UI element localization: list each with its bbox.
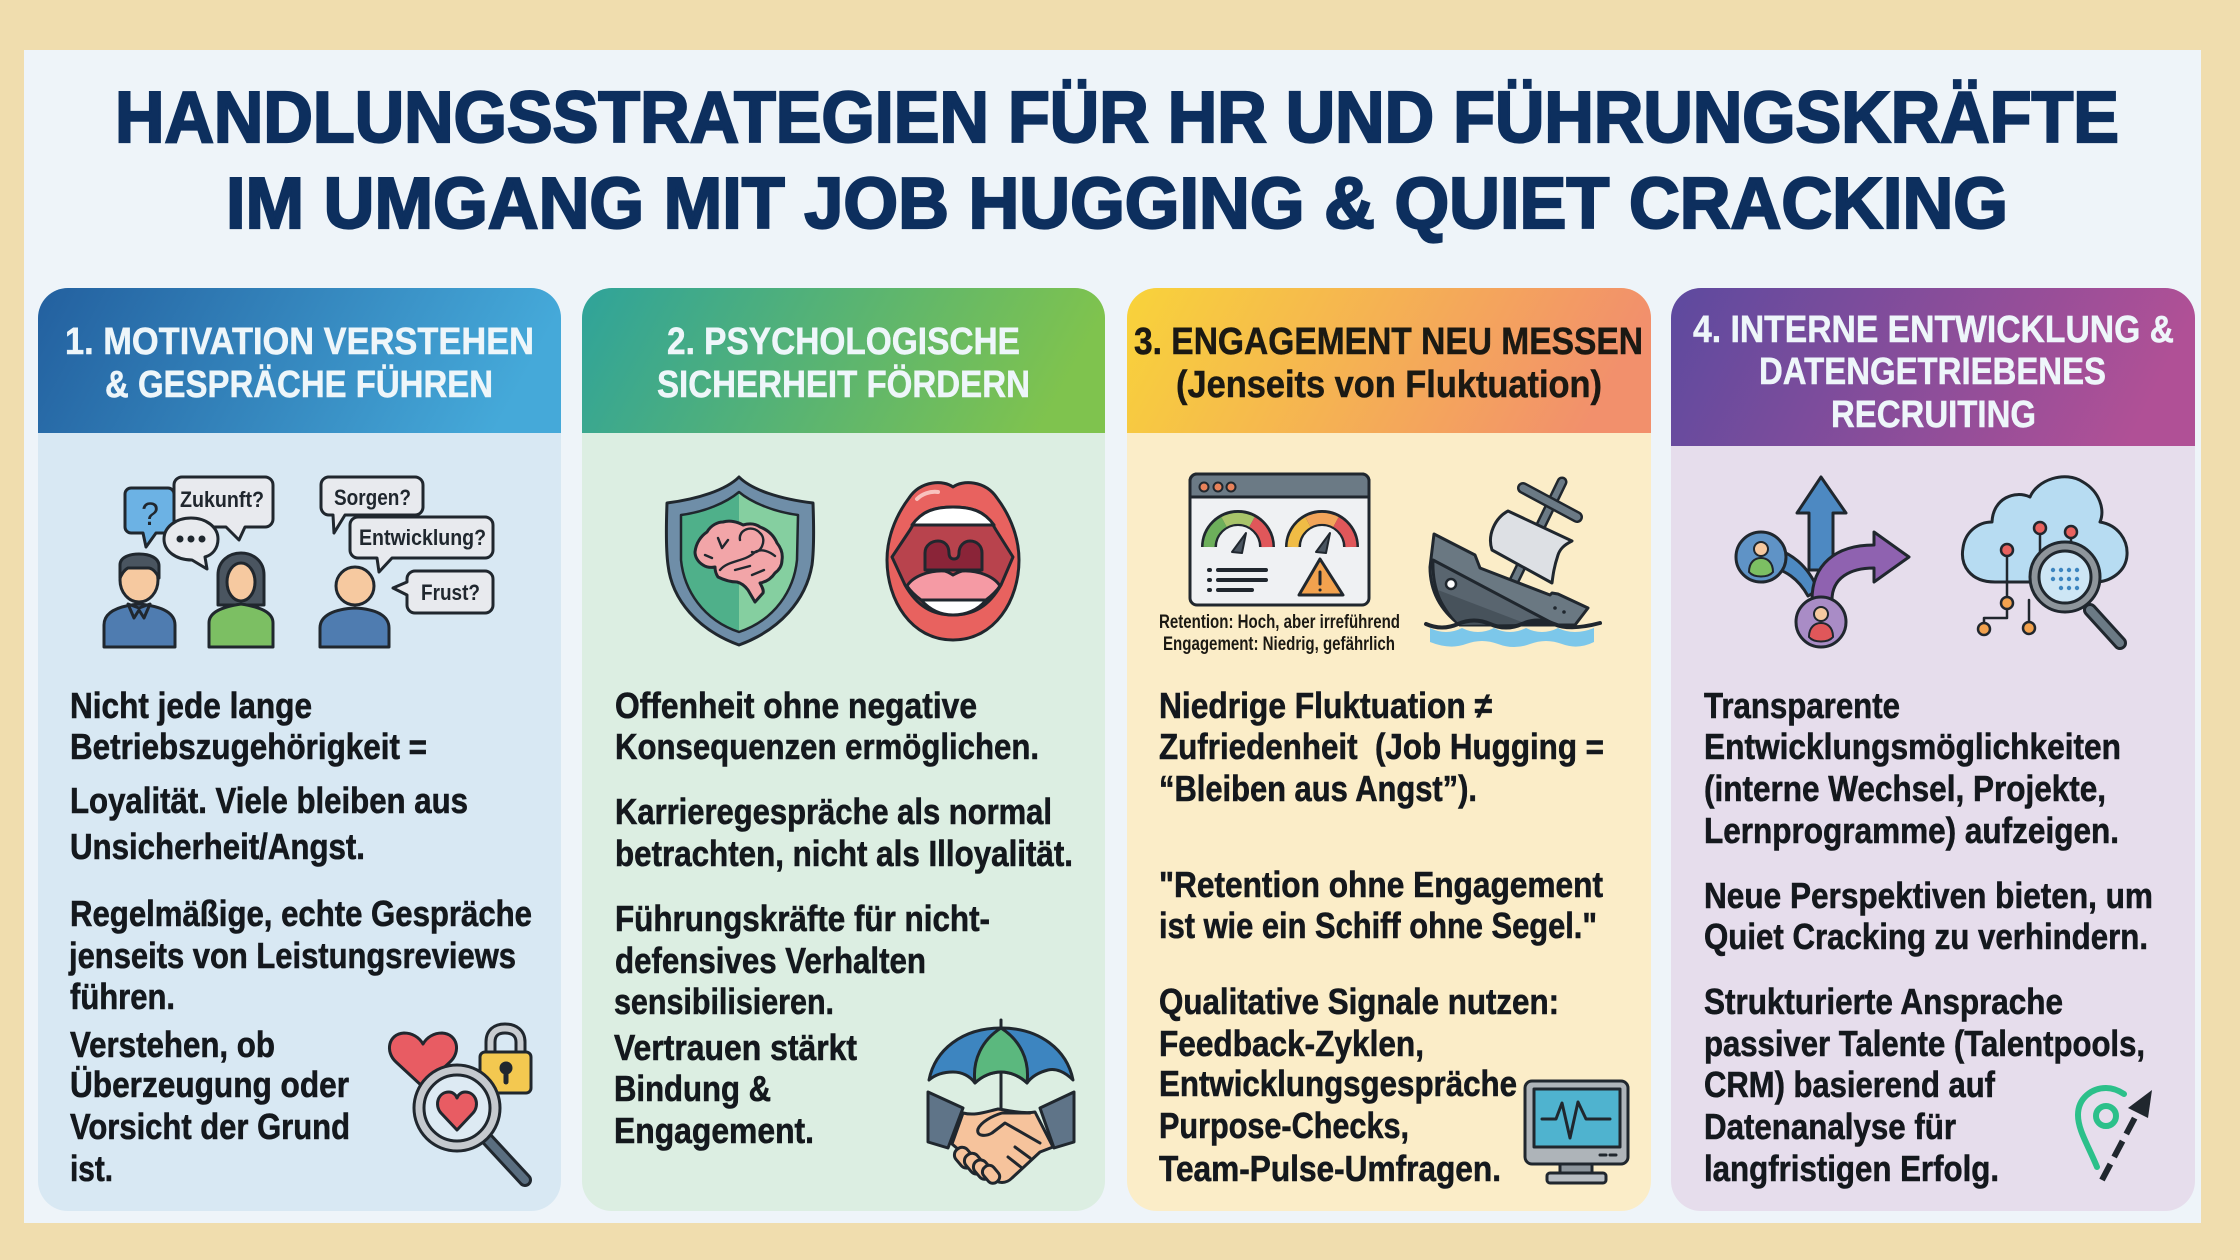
panel 1 text: Regelmäßige, echte Gespräche <box>70 893 532 934</box>
panel 3 header <box>1127 288 1651 433</box>
panel 1 header: & GESPRÄCHE FÜHREN <box>105 363 493 406</box>
panel 3 text: Feedback-Zyklen, <box>1159 1023 1424 1064</box>
panel 1 header <box>38 288 561 433</box>
panel 1 header: 1. MOTIVATION VERSTEHEN <box>65 321 534 363</box>
panel 4 text <box>1704 685 2153 1189</box>
panel 2 header <box>582 288 1105 433</box>
panel 4 text: Strukturierte Ansprache <box>1704 981 2063 1022</box>
icon: people talking with speech bubbles: Entwicklung? <box>359 525 486 550</box>
panel 4 text: Datenanalyse für <box>1704 1106 1956 1147</box>
panel 2 text: Bindung & <box>614 1068 771 1109</box>
panel 2 header: SICHERHEIT FÖRDERN <box>657 363 1030 406</box>
panel 4 text: Transparente <box>1704 685 1900 726</box>
panel 3 text: "Retention ohne Engagement <box>1159 864 1603 905</box>
panel 4 header: 4. INTERNE ENTWICKLUNG & <box>1693 309 2174 351</box>
icon: umbrella over handshake <box>928 1020 1074 1186</box>
panel 4 header: RECRUITING <box>1831 394 2036 436</box>
panel 1 text: jenseits von Leistungsreviews <box>68 935 516 976</box>
icon: open mouth <box>887 483 1019 640</box>
icon: dashboard with gauges <box>1190 474 1369 605</box>
panel 3 header: 3. ENGAGEMENT NEU MESSEN <box>1134 321 1643 363</box>
panel 3 text: ist wie ein Schiff ohne Segel." <box>1159 905 1597 946</box>
panel 4 header: DATENGETRIEBENES <box>1759 351 2106 393</box>
title: HANDLUNGSSTRATEGIEN FÜR HR UND FÜHRUNGSKRÄFTE <box>115 78 2119 158</box>
panel: 4 Interne Entwicklung <box>1671 288 2195 1211</box>
panel 2 text: defensives Verhalten <box>615 940 926 981</box>
panel 1 text: Vorsicht der Grund <box>70 1106 350 1147</box>
dashboard caption <box>1159 612 1400 655</box>
panel 1 text: Nicht jede lange <box>70 685 312 726</box>
dashboard caption: Retention: Hoch, aber irreführend <box>1159 612 1400 633</box>
panel 2 text: sensibilisieren. <box>614 981 834 1022</box>
title: IM UMGANG MIT JOB HUGGING & QUIET CRACKING <box>226 164 2008 244</box>
panel 2 text: Führungskräfte für nicht- <box>615 898 990 939</box>
panel 4 text: langfristigen Erfolg. <box>1704 1148 1999 1189</box>
panel 4 text: (interne Wechsel, Projekte, <box>1704 768 2106 809</box>
panel 3 text: Team-Pulse-Umfragen. <box>1159 1148 1501 1189</box>
panel 4 text: passiver Talente (Talentpools, <box>1704 1023 2145 1064</box>
panel 4 text: Quiet Cracking zu verhindern. <box>1704 916 2148 957</box>
icon: people talking with speech bubbles: Frust? <box>421 580 480 605</box>
panel 3 text: Qualitative Signale nutzen: <box>1159 981 1559 1022</box>
panel 1 text: führen. <box>70 976 175 1017</box>
panel: 1 Motivation verstehen <box>38 288 561 1211</box>
panel 2 text: Karrieregespräche als normal <box>615 791 1052 832</box>
panel 4 text: Entwicklungsmöglichkeiten <box>1704 726 2121 767</box>
icon: people talking with speech bubbles <box>104 477 493 647</box>
icon: location pin with dashed arrow <box>2078 1088 2152 1180</box>
panel 1 text: Verstehen, ob <box>70 1024 275 1065</box>
panel 1 text <box>68 685 532 1189</box>
panel 1 text: Loyalität. Viele bleiben aus <box>70 780 468 821</box>
panel: 3 Engagement neu messen <box>1127 288 1651 1211</box>
panel 3 text: Entwicklungsgespräche <box>1159 1063 1517 1104</box>
icon: people talking with speech bubbles: ? <box>141 496 159 532</box>
icon: people talking with speech bubbles: Zukunft? <box>180 487 264 512</box>
panel 2 header: 2. PSYCHOLOGISCHE <box>667 321 1020 363</box>
panel 2 text: Vertrauen stärkt <box>614 1027 857 1068</box>
icon: heart, lock and magnifier <box>389 1024 531 1180</box>
panel 3 header: (Jenseits von Fluktuation) <box>1176 364 1602 406</box>
panel 2 text: Offenheit ohne negative <box>615 685 977 726</box>
panel 3 text <box>1159 685 1604 1189</box>
panel: 2 Psychologische Sicherheit <box>582 288 1105 1211</box>
panel 1 text: Überzeugung oder <box>70 1064 349 1105</box>
panel 3 text: “Bleiben aus Angst”). <box>1159 768 1477 809</box>
icon: career path arrows <box>1736 477 1909 647</box>
panel 3 text: Niedrige Fluktuation ≠ <box>1159 685 1492 726</box>
dashboard caption: Engagement: Niedrig, gefährlich <box>1163 634 1395 655</box>
panel 3 text: Purpose-Checks, <box>1159 1105 1409 1146</box>
icon: monitor with pulse <box>1525 1081 1628 1183</box>
title <box>115 78 2119 244</box>
panel 1 text: Betriebszugehörigkeit = <box>70 726 427 767</box>
panel 1 text: Unsicherheit/Angst. <box>70 826 365 867</box>
icon: shield with brain <box>666 477 814 645</box>
panel 3 text: Zufriedenheit (Job Hugging = <box>1159 726 1604 767</box>
icon: people talking with speech bubbles: Sorgen? <box>334 485 411 510</box>
panel 4 text: Lernprogramme) aufzeigen. <box>1704 810 2119 851</box>
icon: sinking ship <box>1426 482 1600 647</box>
panel 2 text: Konsequenzen ermöglichen. <box>615 726 1039 767</box>
panel 4 header <box>1671 288 2195 446</box>
panel 1 text: ist. <box>70 1148 113 1189</box>
panel 2 text: betrachten, nicht als Illoyalität. <box>615 833 1073 874</box>
panel 2 text <box>614 685 1073 1151</box>
panel 2 text: Engagement. <box>614 1110 814 1151</box>
panel 4 text: Neue Perspektiven bieten, um <box>1704 875 2153 916</box>
icon: data cloud with magnifier <box>1962 477 2127 643</box>
panel 4 text: CRM) basierend auf <box>1704 1064 1996 1105</box>
